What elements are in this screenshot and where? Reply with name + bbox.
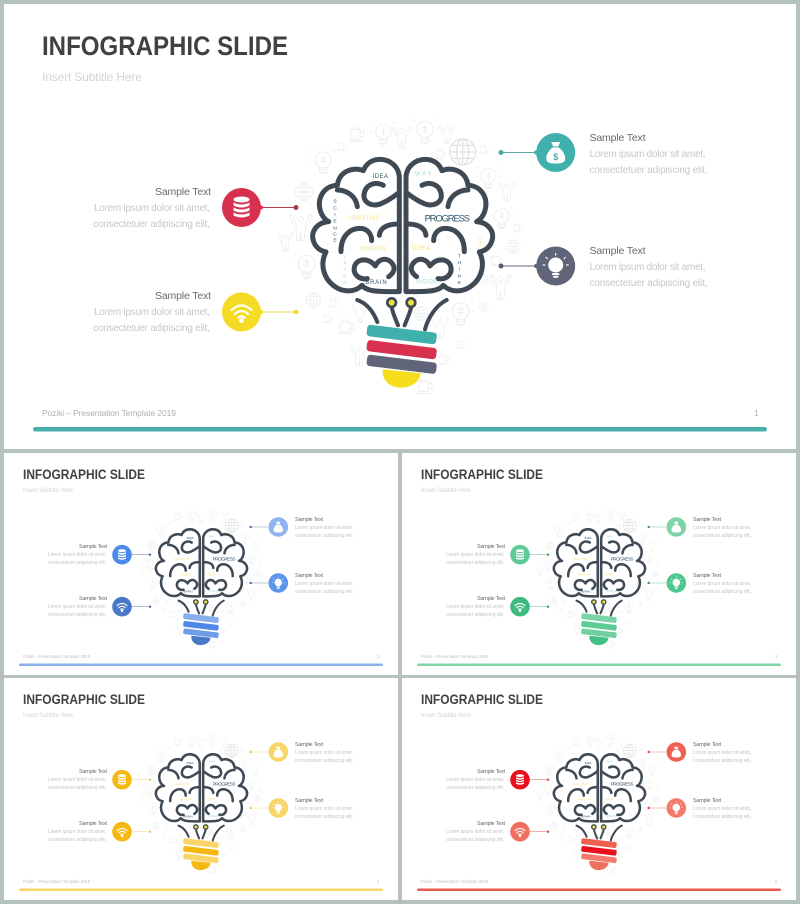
brain bulb illustration: BRAIN <box>581 590 591 594</box>
callouts: consectetuer adipiscing elit, <box>48 785 106 791</box>
callouts: Lorem ipsum dolor sit amet, <box>48 604 106 610</box>
footer: 3 <box>775 654 778 659</box>
title: INFOGRAPHIC SLIDE <box>23 467 145 482</box>
callouts: Sample Text <box>79 544 107 550</box>
brain words: ART <box>478 235 482 251</box>
callouts: Lorem ipsum dolor sit amet, <box>295 525 353 531</box>
callouts: Sample Text <box>79 596 107 602</box>
callouts: consectetuer adipiscing elit, <box>48 560 106 566</box>
brain bulb illustration: IDEA <box>604 797 614 801</box>
title: INFOGRAPHIC SLIDE <box>421 467 543 482</box>
brain bulb illustration <box>277 119 522 393</box>
brain bulb illustration: WAY <box>209 534 215 538</box>
brain bulb illustration: VISION <box>606 589 617 593</box>
brain bulb illustration: BRAIN <box>183 815 193 819</box>
callouts: Sample Text <box>693 742 721 748</box>
title: INFOGRAPHIC SLIDE <box>42 31 288 61</box>
callouts: Sample Text <box>477 544 505 550</box>
brain words: IDEA <box>411 243 431 252</box>
brain bulb illustration: CREATIVE <box>174 782 189 786</box>
footer <box>33 408 767 432</box>
callouts <box>48 517 353 618</box>
callouts: Lorem ipsum dolor sit amet, <box>446 829 504 835</box>
callout: database: consectetuer adipiscing elit, <box>93 219 210 230</box>
callouts: Lorem ipsum dolor sit amet, <box>446 604 504 610</box>
callouts: Sample Text <box>79 769 107 775</box>
panel: green slide <box>402 453 796 675</box>
footer <box>417 879 781 891</box>
brain bulb illustration: WAY <box>607 534 613 538</box>
callout: money bag: consectetuer adipiscing elit, <box>590 165 708 176</box>
callouts: consectetuer adipiscing elit, <box>446 560 504 566</box>
callouts: Sample Text <box>477 821 505 827</box>
subtitle: Insert Subtitle Here <box>23 488 74 494</box>
subtitle: Insert Subtitle Here <box>42 70 142 84</box>
brain bulb illustration: WAY <box>209 759 215 763</box>
brain bulb illustration: IDEA <box>206 797 216 801</box>
callouts: Lorem ipsum dolor sit amet, <box>295 750 353 756</box>
brain bulb illustration: WAY <box>607 759 613 763</box>
callouts: consectetuer adipiscing elit, <box>693 758 751 764</box>
brain bulb illustration: VISION <box>208 589 219 593</box>
brain bulb illustration: CREATIVE <box>572 782 587 786</box>
callouts: Sample Text <box>295 742 323 748</box>
callouts: consectetuer adipiscing elit, <box>295 589 353 595</box>
callouts: Lorem ipsum dolor sit amet, <box>446 777 504 783</box>
callout: wifi <box>93 290 298 334</box>
callouts: Sample Text <box>79 821 107 827</box>
subtitle: Insert Subtitle Here <box>421 713 472 719</box>
callout: database <box>93 186 298 230</box>
callouts: Lorem ipsum dolor sit amet, <box>693 750 751 756</box>
footer: Poziki – Presentation Template 2019 <box>421 879 489 884</box>
footer: 1 <box>754 408 759 418</box>
callout: money bag: Sample Text <box>590 132 646 144</box>
footer: 4 <box>377 879 380 884</box>
brain bulb illustration: BRAIN <box>581 815 591 819</box>
callout: database: Lorem ipsum dolor sit amet, <box>94 203 210 214</box>
callouts: consectetuer adipiscing elit, <box>295 814 353 820</box>
footer: Poziki – Presentation Template 2019 <box>42 408 176 418</box>
brain bulb illustration: CREATIVE <box>572 557 587 561</box>
brain bulb illustration <box>536 734 660 873</box>
subtitle: Insert Subtitle Here <box>421 488 472 494</box>
brain bulb illustration: VISION <box>606 814 617 818</box>
brain bulb illustration: VISION <box>208 814 219 818</box>
brain bulb illustration: BRAIN <box>183 590 193 594</box>
panel: main slide <box>4 4 796 449</box>
brain bulb illustration: PROGRESS <box>213 782 236 788</box>
title: INFOGRAPHIC SLIDE <box>23 692 145 707</box>
brain words: PROGRESS <box>425 213 470 223</box>
callouts: Lorem ipsum dolor sit amet, <box>446 552 504 558</box>
callout: wifi: consectetuer adipiscing elit, <box>93 323 210 334</box>
callouts <box>446 517 751 618</box>
callout: money bag: Lorem ipsum dolor sit amet, <box>590 149 706 160</box>
callout: wifi: Lorem ipsum dolor sit amet, <box>94 307 210 318</box>
brain words: BRAIN <box>365 280 387 286</box>
callouts: Lorem ipsum dolor sit amet, <box>295 806 353 812</box>
callouts: Lorem ipsum dolor sit amet, <box>693 581 751 587</box>
brain bulb illustration: MISSION <box>578 573 591 577</box>
footer <box>417 654 781 666</box>
brain bulb illustration: MISSION <box>180 573 193 577</box>
callouts: consectetuer adipiscing elit, <box>295 533 353 539</box>
callouts: consectetuer adipiscing elit, <box>48 612 106 618</box>
title: INFOGRAPHIC SLIDE <box>421 692 543 707</box>
footer: Poziki – Presentation Template 2019 <box>23 654 91 659</box>
brain bulb illustration <box>138 734 262 873</box>
brain words: MISSION <box>360 247 385 253</box>
callouts: Sample Text <box>477 596 505 602</box>
brain bulb illustration <box>536 509 660 648</box>
brain bulb illustration: IDEA <box>604 572 614 576</box>
panel: red slide <box>402 678 796 900</box>
brain bulb illustration: PROGRESS <box>213 557 236 563</box>
callouts: Sample Text <box>693 573 721 579</box>
brain bulb illustration: PROGRESS <box>611 782 634 788</box>
brain words: THINK <box>458 253 462 286</box>
brain bulb illustration: IDEA <box>585 761 593 765</box>
callouts: Sample Text <box>693 517 721 523</box>
callouts: consectetuer adipiscing elit, <box>446 837 504 843</box>
callouts: consectetuer adipiscing elit, <box>693 589 751 595</box>
callouts: Sample Text <box>477 769 505 775</box>
callouts: Sample Text <box>693 798 721 804</box>
brain bulb illustration: MISSION <box>578 798 591 802</box>
callouts <box>48 742 353 843</box>
callout: light bulb: Lorem ipsum dolor sit amet, <box>590 262 706 273</box>
subtitle: Insert Subtitle Here <box>23 713 74 719</box>
callouts: consectetuer adipiscing elit, <box>693 814 751 820</box>
panel: blue slide <box>4 453 398 675</box>
footer <box>19 654 383 666</box>
footer: Poziki – Presentation Template 2019 <box>421 654 489 659</box>
callout: database: Sample Text <box>155 186 211 198</box>
callouts: consectetuer adipiscing elit, <box>446 612 504 618</box>
footer: Poziki – Presentation Template 2019 <box>23 879 91 884</box>
brain bulb illustration: IDEA <box>187 536 195 540</box>
brain bulb illustration <box>138 509 262 648</box>
callouts: consectetuer adipiscing elit, <box>446 785 504 791</box>
callout: money bag: $ <box>553 152 558 162</box>
callouts: Lorem ipsum dolor sit amet, <box>693 806 751 812</box>
brain bulb illustration: IDEA <box>206 572 216 576</box>
callouts: Lorem ipsum dolor sit amet, <box>48 777 106 783</box>
brain bulb illustration: IDEA <box>585 536 593 540</box>
brain words: IDEA <box>373 174 388 180</box>
callouts: Sample Text <box>295 573 323 579</box>
footer <box>19 879 383 891</box>
callout: light bulb: consectetuer adipiscing elit, <box>590 278 708 289</box>
brain bulb illustration: MISSION <box>180 798 193 802</box>
brain bulb illustration: CREATIVE <box>174 557 189 561</box>
bulb base <box>366 324 437 388</box>
panel: yellow slide <box>4 678 398 900</box>
callouts: Lorem ipsum dolor sit amet, <box>693 525 751 531</box>
callout: light bulb: Sample Text <box>590 245 646 257</box>
footer: 5 <box>775 879 778 884</box>
callouts: Lorem ipsum dolor sit amet, <box>295 581 353 587</box>
brain bulb illustration: IDEA <box>187 761 195 765</box>
callouts: Sample Text <box>295 517 323 523</box>
callouts <box>446 742 751 843</box>
brain words: WAY <box>415 171 432 177</box>
callout: light bulb <box>498 245 708 289</box>
brain words: CREATIVE <box>348 216 380 222</box>
callouts: Sample Text <box>295 798 323 804</box>
footer: 2 <box>377 654 380 659</box>
callouts: consectetuer adipiscing elit, <box>48 837 106 843</box>
callouts: consectetuer adipiscing elit, <box>693 533 751 539</box>
callouts: Lorem ipsum dolor sit amet, <box>48 829 106 835</box>
callouts: consectetuer adipiscing elit, <box>295 758 353 764</box>
callout: money bag <box>498 132 708 176</box>
brain words: VISION <box>416 279 437 285</box>
brain words <box>333 171 482 286</box>
brain words: LEARN <box>343 253 347 285</box>
callouts: Lorem ipsum dolor sit amet, <box>48 552 106 558</box>
brain bulb illustration: PROGRESS <box>611 557 634 563</box>
callout: wifi: Sample Text <box>155 290 211 302</box>
brain words: SCIENCE <box>333 199 337 243</box>
